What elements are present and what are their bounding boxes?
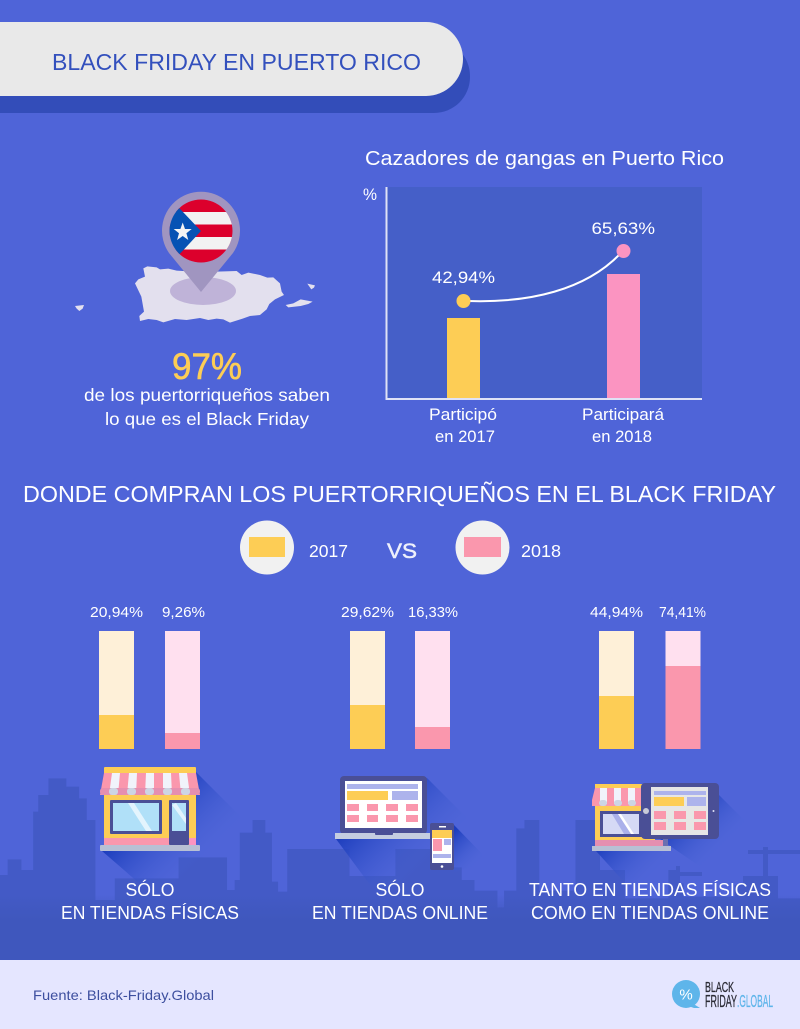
bar 2018 xyxy=(607,274,640,398)
bar chart: bargain hunters: Participó xyxy=(429,406,497,424)
logo: FRIDAY xyxy=(705,991,737,1011)
bar chart: bargain hunters: en 2017 xyxy=(435,428,495,446)
logo xyxy=(672,979,773,1011)
trend curve xyxy=(468,254,620,301)
bars: online stores: 16,33% xyxy=(408,604,458,621)
category label: both channels: COMO EN TIENDAS ONLINE xyxy=(531,903,769,923)
bar 2017 xyxy=(447,318,480,398)
legend: VS xyxy=(387,540,417,563)
bars: both channels: 74,41% xyxy=(659,604,706,621)
97% statistic: de los puertorriqueños saben xyxy=(84,385,330,405)
phone xyxy=(430,823,454,870)
bar chart: bargain hunters: 65,63% xyxy=(592,219,655,238)
island map xyxy=(75,266,315,323)
logo: % xyxy=(679,986,693,1004)
97% statistic: 97% xyxy=(172,346,242,387)
bar chart: bargain hunters: 42,94% xyxy=(432,268,495,287)
icon: store with tablet xyxy=(592,783,765,905)
map pin xyxy=(162,192,240,292)
category label: online stores: SÓLO xyxy=(376,879,424,900)
icon: store xyxy=(100,767,252,910)
bars: physical stores xyxy=(90,604,205,749)
bars: both channels: 44,94% xyxy=(590,604,643,621)
source text: Fuente: Black-Friday.Global xyxy=(33,987,214,1003)
bar chart: bargain hunters: % xyxy=(363,185,377,204)
bars: physical stores: 20,94% xyxy=(90,604,143,621)
map of Puerto Rico with flag pin xyxy=(75,192,315,323)
title banner xyxy=(0,22,470,113)
bars: physical stores: 9,26% xyxy=(162,604,205,621)
bars: online stores: 29,62% xyxy=(341,604,394,621)
category label: physical stores: EN TIENDAS FÍSICAS xyxy=(61,903,239,923)
flag of Puerto Rico xyxy=(170,200,232,262)
icon: laptop and phone xyxy=(335,776,490,905)
category label: physical stores: SÓLO xyxy=(126,879,174,900)
bar chart: bargain hunters: Participará xyxy=(582,406,665,424)
category label: online stores: EN TIENDAS ONLINE xyxy=(312,903,488,923)
category label: both channels xyxy=(529,880,771,923)
title text: BLACK FRIDAY EN PUERTO RICO xyxy=(52,49,421,75)
legend xyxy=(240,520,561,574)
tablet xyxy=(641,783,719,839)
category label: physical stores xyxy=(61,879,239,923)
bar chart: bargain hunters xyxy=(363,185,702,446)
pin shadow ellipse xyxy=(170,277,236,305)
section heading: DONDE COMPRAN LOS PUERTORRIQUEÑOS EN EL BLACK FRIDAY xyxy=(23,481,776,507)
legend: 2018 xyxy=(521,541,561,561)
chart heading: Cazadores de gangas en Puerto Rico xyxy=(365,147,724,170)
category label: both channels: TANTO EN TIENDAS FÍSICAS xyxy=(529,880,771,900)
category label: online stores xyxy=(312,879,488,923)
bars: both channels xyxy=(590,604,706,749)
97% statistic xyxy=(84,346,330,429)
footer xyxy=(0,960,800,1029)
bar chart: bargain hunters: en 2018 xyxy=(592,428,652,446)
bars: online stores xyxy=(341,604,458,749)
97% statistic: lo que es el Black Friday xyxy=(105,409,309,429)
logo: BLACK xyxy=(705,979,734,996)
legend: 2017 xyxy=(309,541,348,561)
city skyline background xyxy=(0,778,800,960)
